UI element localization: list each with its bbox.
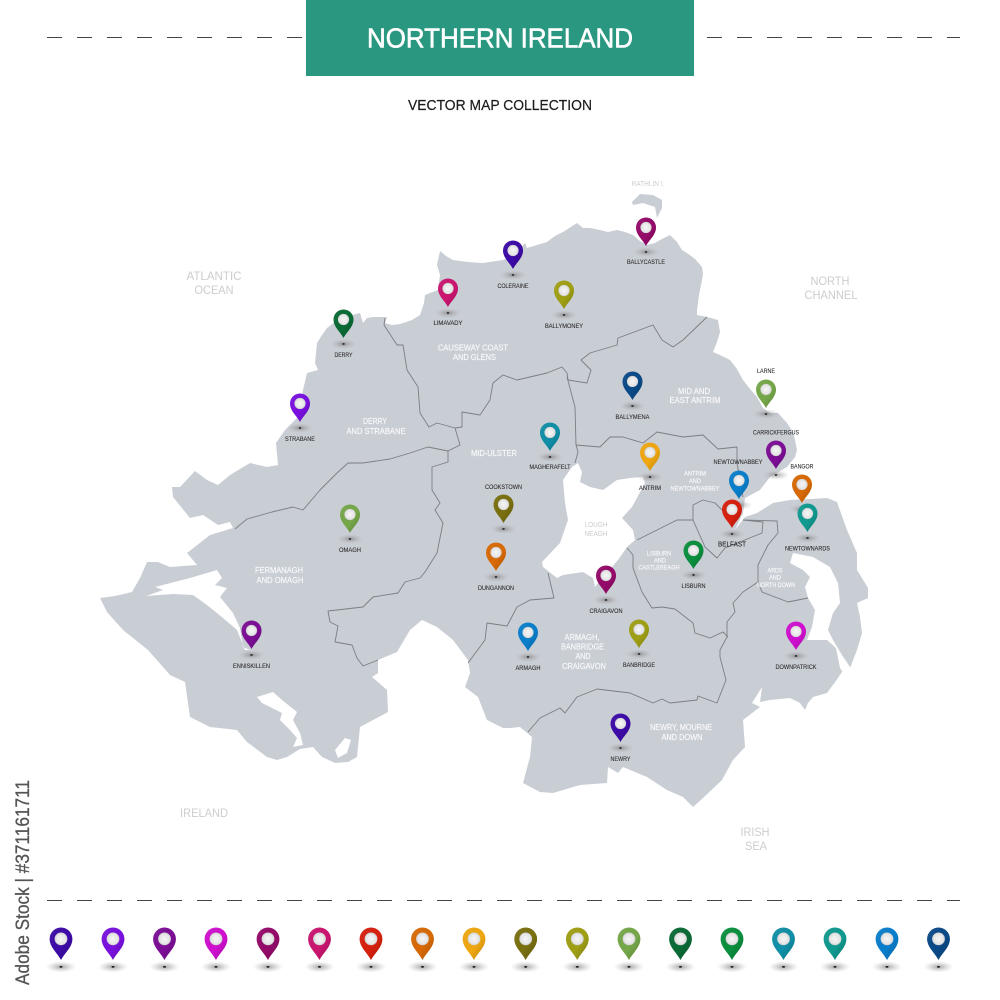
pin: Lisburn xyxy=(680,540,707,590)
sea and water labels: IRELAND xyxy=(180,806,228,820)
pin: Bangor: BANGOR xyxy=(790,464,814,471)
district labels: AND xyxy=(689,478,701,485)
Lough Neagh xyxy=(542,463,645,587)
district labels: MID AND xyxy=(678,386,710,396)
sea and water labels: CHANNEL xyxy=(804,288,858,302)
pin: Cookstown: COOKSTOWN xyxy=(485,484,522,491)
sea and water labels: IRISH xyxy=(740,825,770,839)
pin: Armagh xyxy=(514,622,542,672)
district labels: ARDS xyxy=(768,568,783,574)
pin: Bangor xyxy=(788,464,816,514)
district labels: CASTLEREAGH xyxy=(638,564,680,572)
district labels: NORTH DOWN xyxy=(757,582,795,589)
sea and water labels: NEAGH xyxy=(584,529,608,538)
pin: Newtownards: NEWTOWNARDS xyxy=(785,546,830,552)
district labels: ANTRIM xyxy=(684,470,706,478)
district labels: CRAIGAVON xyxy=(562,661,606,671)
Rathlin Island xyxy=(632,194,662,218)
sea and water labels: ATLANTIC xyxy=(186,269,242,283)
district labels: AND STRABANE xyxy=(346,426,406,436)
pin: Ballymena: BALLYMENA xyxy=(616,414,650,421)
map of Northern Ireland xyxy=(100,194,868,807)
pin: Limavady: LIMAVADY xyxy=(434,320,463,327)
pin: Carrickfergus: CARRICKFERGUS xyxy=(753,430,799,437)
town pins on map xyxy=(233,218,830,763)
district labels xyxy=(255,342,795,742)
pin: Banbridge xyxy=(623,620,655,669)
district labels: AND GLENS xyxy=(453,352,496,362)
pin: Downpatrick xyxy=(776,622,817,671)
pin: Antrim xyxy=(636,442,664,492)
pin: Strabane xyxy=(285,394,315,443)
pin: Downpatrick: DOWNPATRICK xyxy=(776,664,817,671)
pin: Magherafelt xyxy=(530,422,571,471)
small inlet xyxy=(335,738,351,758)
district labels: DERRY xyxy=(363,416,387,426)
pin: Enniskillen: ENNISKILLEN xyxy=(233,663,270,670)
pin: Strabane: STRABANE xyxy=(285,436,315,443)
district labels: CAUSEWAY COAST xyxy=(438,342,508,352)
pin: Craigavon: CRAIGAVON xyxy=(590,608,623,615)
district labels: NEWRY, MOURNE xyxy=(650,722,712,732)
pin: Carrickfergus xyxy=(753,430,799,480)
pin: Larne xyxy=(752,368,780,419)
pin: Dungannon: DUNGANNON xyxy=(478,585,514,592)
Strangford Lough xyxy=(790,553,852,674)
district labels: AND xyxy=(654,558,666,564)
district labels: AND xyxy=(576,651,590,661)
district labels: AND DOWN xyxy=(662,732,702,742)
pin: Omagh: OMAGH xyxy=(339,547,361,554)
pin: Ballymoney xyxy=(545,280,584,330)
land mass xyxy=(100,223,868,807)
district labels: BANBRIDGE xyxy=(561,642,604,652)
sea and water labels: SEA xyxy=(745,839,767,853)
district borders xyxy=(235,317,808,732)
pin: Derry: DERRY xyxy=(334,352,353,359)
district labels: EAST ANTRIM xyxy=(670,395,720,405)
sea and water labels: OCEAN xyxy=(194,283,234,297)
pin: Belfast xyxy=(718,500,747,549)
pin: Armagh: ARMAGH xyxy=(516,665,541,672)
pin: Newtownards xyxy=(785,504,830,552)
pin: Derry xyxy=(330,310,357,359)
pin: Newry: NEWRY xyxy=(610,756,631,763)
pin: Ballymena xyxy=(616,372,650,421)
district labels: LISBURN xyxy=(647,550,671,558)
pin: Larne: LARNE xyxy=(757,368,775,375)
sea and water labels xyxy=(180,179,858,853)
district labels: FERMANAGH xyxy=(255,565,303,575)
sea and water labels: RATHLIN I. xyxy=(632,179,664,188)
district labels: NEWTOWNABBEY xyxy=(670,486,720,492)
pin: Newtownabbey: NEWTOWNABBEY xyxy=(714,459,763,466)
pin colour legend row xyxy=(46,928,954,973)
district labels: ARMAGH, xyxy=(564,632,600,642)
subtitle: VECTOR MAP COLLECTION xyxy=(408,98,592,114)
Upper Lough Erne xyxy=(257,692,303,747)
pin: Newtownabbey xyxy=(714,459,763,510)
title banner xyxy=(306,0,694,76)
title banner: NORTHERN IRELAND xyxy=(367,22,633,54)
pin: Coleraine: COLERAINE xyxy=(498,283,528,290)
pin: Newry xyxy=(607,714,634,763)
pin: Ballymoney: BALLYMONEY xyxy=(545,323,584,330)
pin: Antrim: ANTRIM xyxy=(639,485,661,492)
pin: Ballycastle xyxy=(627,218,665,266)
pin: Enniskillen xyxy=(233,620,270,670)
district labels: MID-ULSTER xyxy=(471,448,517,458)
pin: Banbridge: BANBRIDGE xyxy=(623,662,655,669)
pin: Limavady xyxy=(434,278,463,327)
pin: Dungannon xyxy=(478,542,514,592)
district labels: AND OMAGH xyxy=(256,575,304,585)
pin: Belfast: BELFAST xyxy=(718,540,747,549)
pin: Coleraine xyxy=(498,240,528,290)
Lower Lough Erne xyxy=(146,570,250,650)
pin: Omagh xyxy=(336,504,364,554)
sea and water labels: LOUGH xyxy=(584,520,608,529)
pin: Craigavon xyxy=(590,566,623,615)
pin: Lisburn: LISBURN xyxy=(682,583,706,590)
pin: Cookstown xyxy=(485,484,522,534)
pin: Ballycastle: BALLYCASTLE xyxy=(627,259,665,266)
pin: Magherafelt: MAGHERAFELT xyxy=(530,464,571,471)
sea and water labels: NORTH xyxy=(810,274,850,288)
side credit text: Adobe Stock | #371161711 xyxy=(13,780,34,985)
district labels: AND xyxy=(769,574,781,582)
